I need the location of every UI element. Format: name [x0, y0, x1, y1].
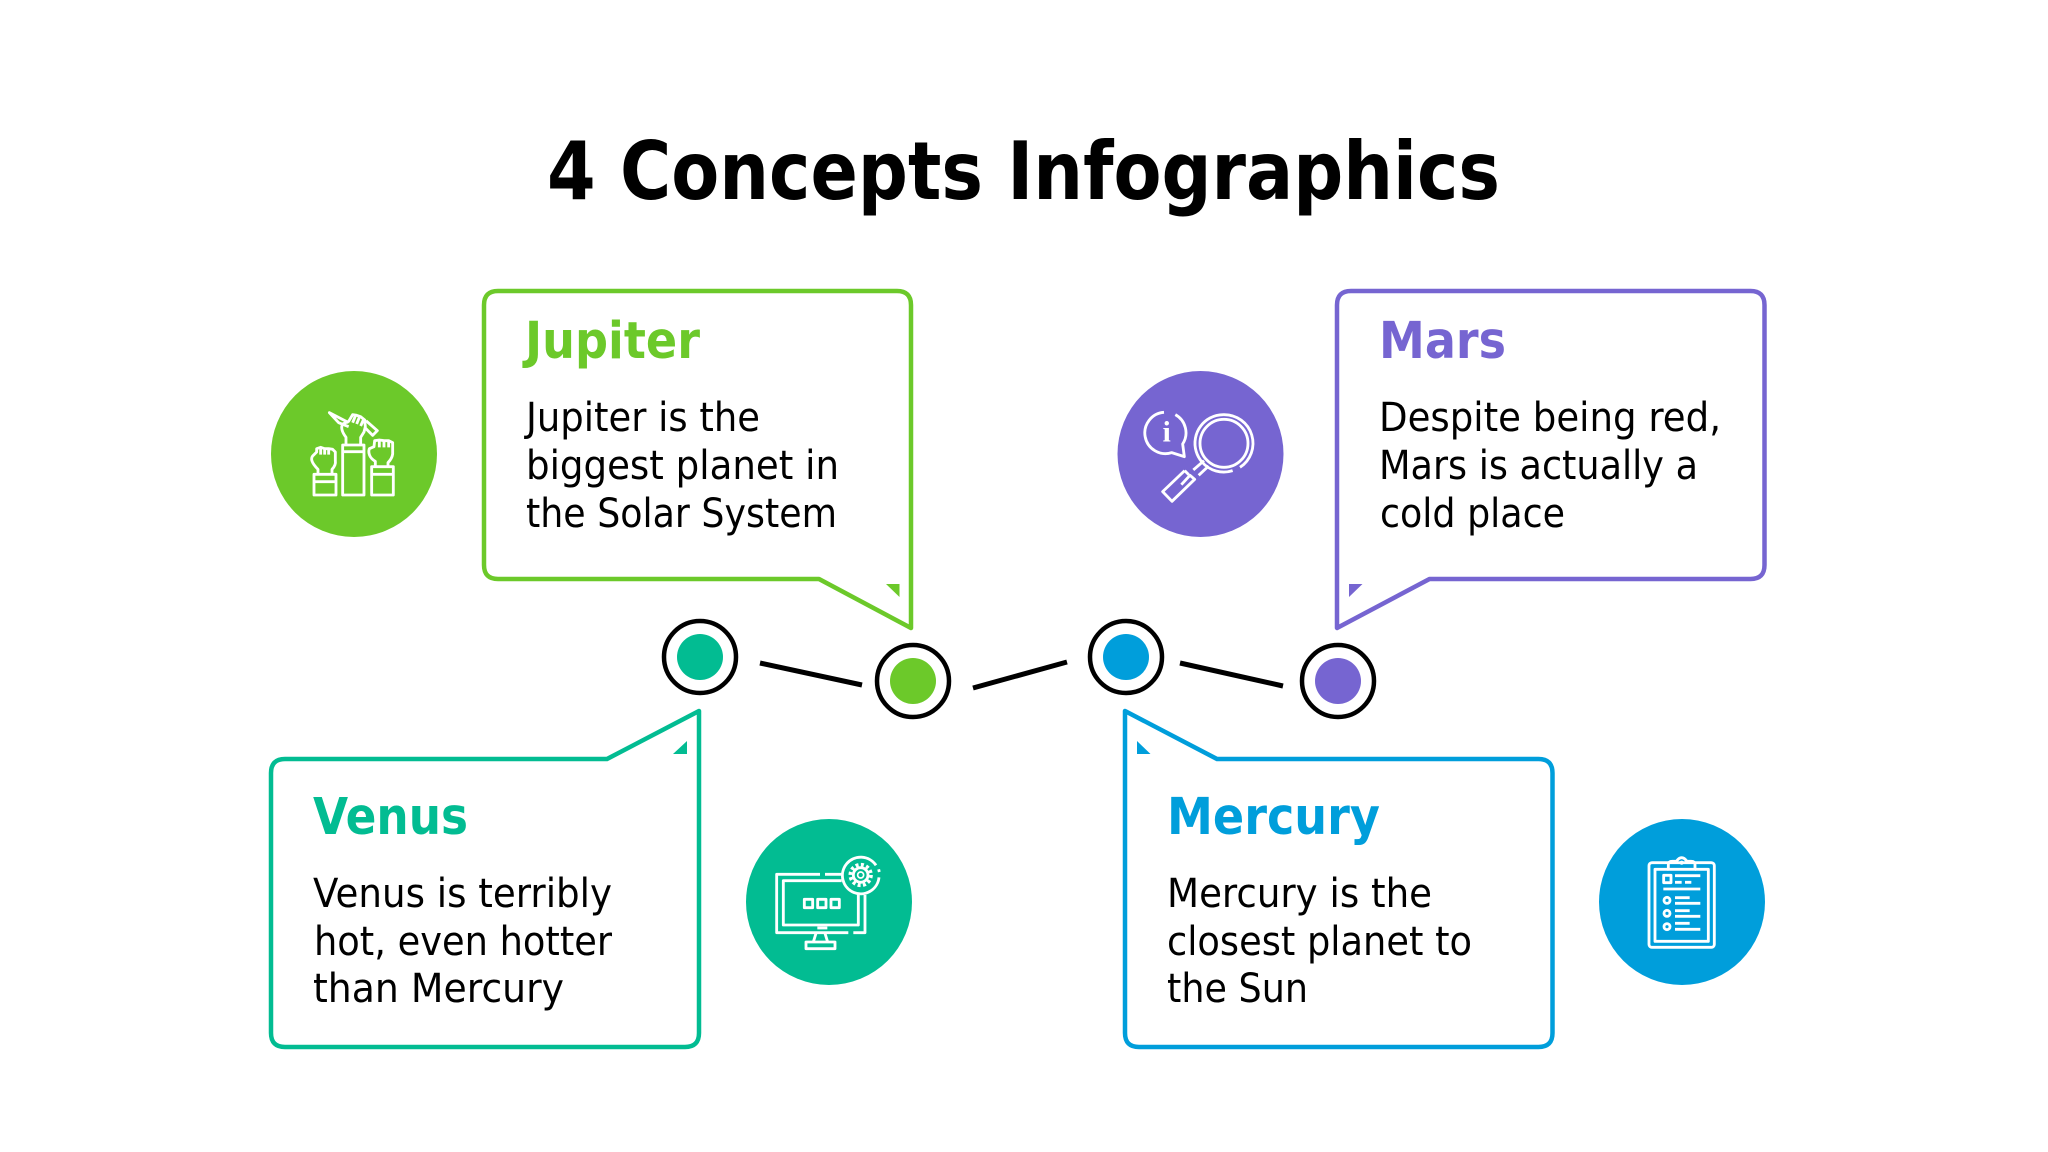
- title: 4 Concepts Infographics: [547, 125, 1500, 218]
- node: venus: [664, 621, 736, 693]
- text block: mars: Despite being red,: [1379, 393, 1721, 441]
- text block: mercury: [1167, 869, 1472, 1012]
- node: jupiter: [877, 645, 949, 717]
- heading: jupiter: Jupiter: [522, 312, 700, 371]
- panel: venus: [271, 711, 699, 1047]
- text block: mercury: closest planet to: [1167, 917, 1472, 965]
- text block: mercury: the Sun: [1167, 964, 1308, 1012]
- bubble corner mark: venus: [673, 741, 687, 754]
- node: mars: [1302, 645, 1374, 717]
- connector line: jupiter to mercury: [973, 662, 1067, 688]
- panel: mars: [1337, 291, 1764, 628]
- text block: jupiter: [523, 393, 839, 537]
- text block: venus: hot, even hotter: [314, 917, 612, 965]
- text block: venus: [313, 869, 612, 1012]
- panel: jupiter: [484, 291, 911, 628]
- heading: mars: Mars: [1379, 312, 1506, 371]
- connector line: mercury to mars: [1180, 663, 1283, 686]
- text block: jupiter: Jupiter is the: [523, 393, 760, 441]
- speech bubble: mercury: [1125, 711, 1552, 1047]
- text block: venus: than Mercury: [313, 964, 564, 1012]
- icon: magnifier with info bubble on purple circle: [1118, 371, 1284, 537]
- speech bubble: jupiter: [484, 291, 911, 628]
- speech bubble: venus: [271, 711, 699, 1047]
- bubble corner mark: mercury: [1137, 741, 1150, 754]
- node: mercury: [1090, 621, 1162, 693]
- panel: mercury: [1125, 711, 1552, 1047]
- connector line: venus to jupiter: [760, 663, 862, 685]
- text block: mars: cold place: [1380, 489, 1565, 537]
- bubble corner mark: mars: [1349, 584, 1362, 597]
- heading: mercury: Mercury: [1167, 788, 1380, 847]
- icon: magnifier with info bubble on purple circle: i: [1163, 417, 1171, 449]
- text block: jupiter: biggest planet in: [526, 441, 839, 489]
- heading: venus: Venus: [313, 788, 468, 847]
- icon: monitor with gear on teal circle: [746, 819, 912, 985]
- text block: mercury: Mercury is the: [1167, 869, 1432, 917]
- text block: jupiter: the Solar System: [526, 489, 837, 537]
- text block: venus: Venus is terribly: [313, 869, 612, 917]
- icon: clipboard checklist on blue circle: [1599, 819, 1765, 985]
- speech bubble: mars: [1337, 291, 1764, 628]
- icon: raised hands on green circle: [271, 371, 437, 537]
- text block: mars: Mars is actually a: [1379, 441, 1698, 489]
- bubble corner mark: jupiter: [886, 584, 900, 597]
- text block: mars: [1379, 393, 1721, 537]
